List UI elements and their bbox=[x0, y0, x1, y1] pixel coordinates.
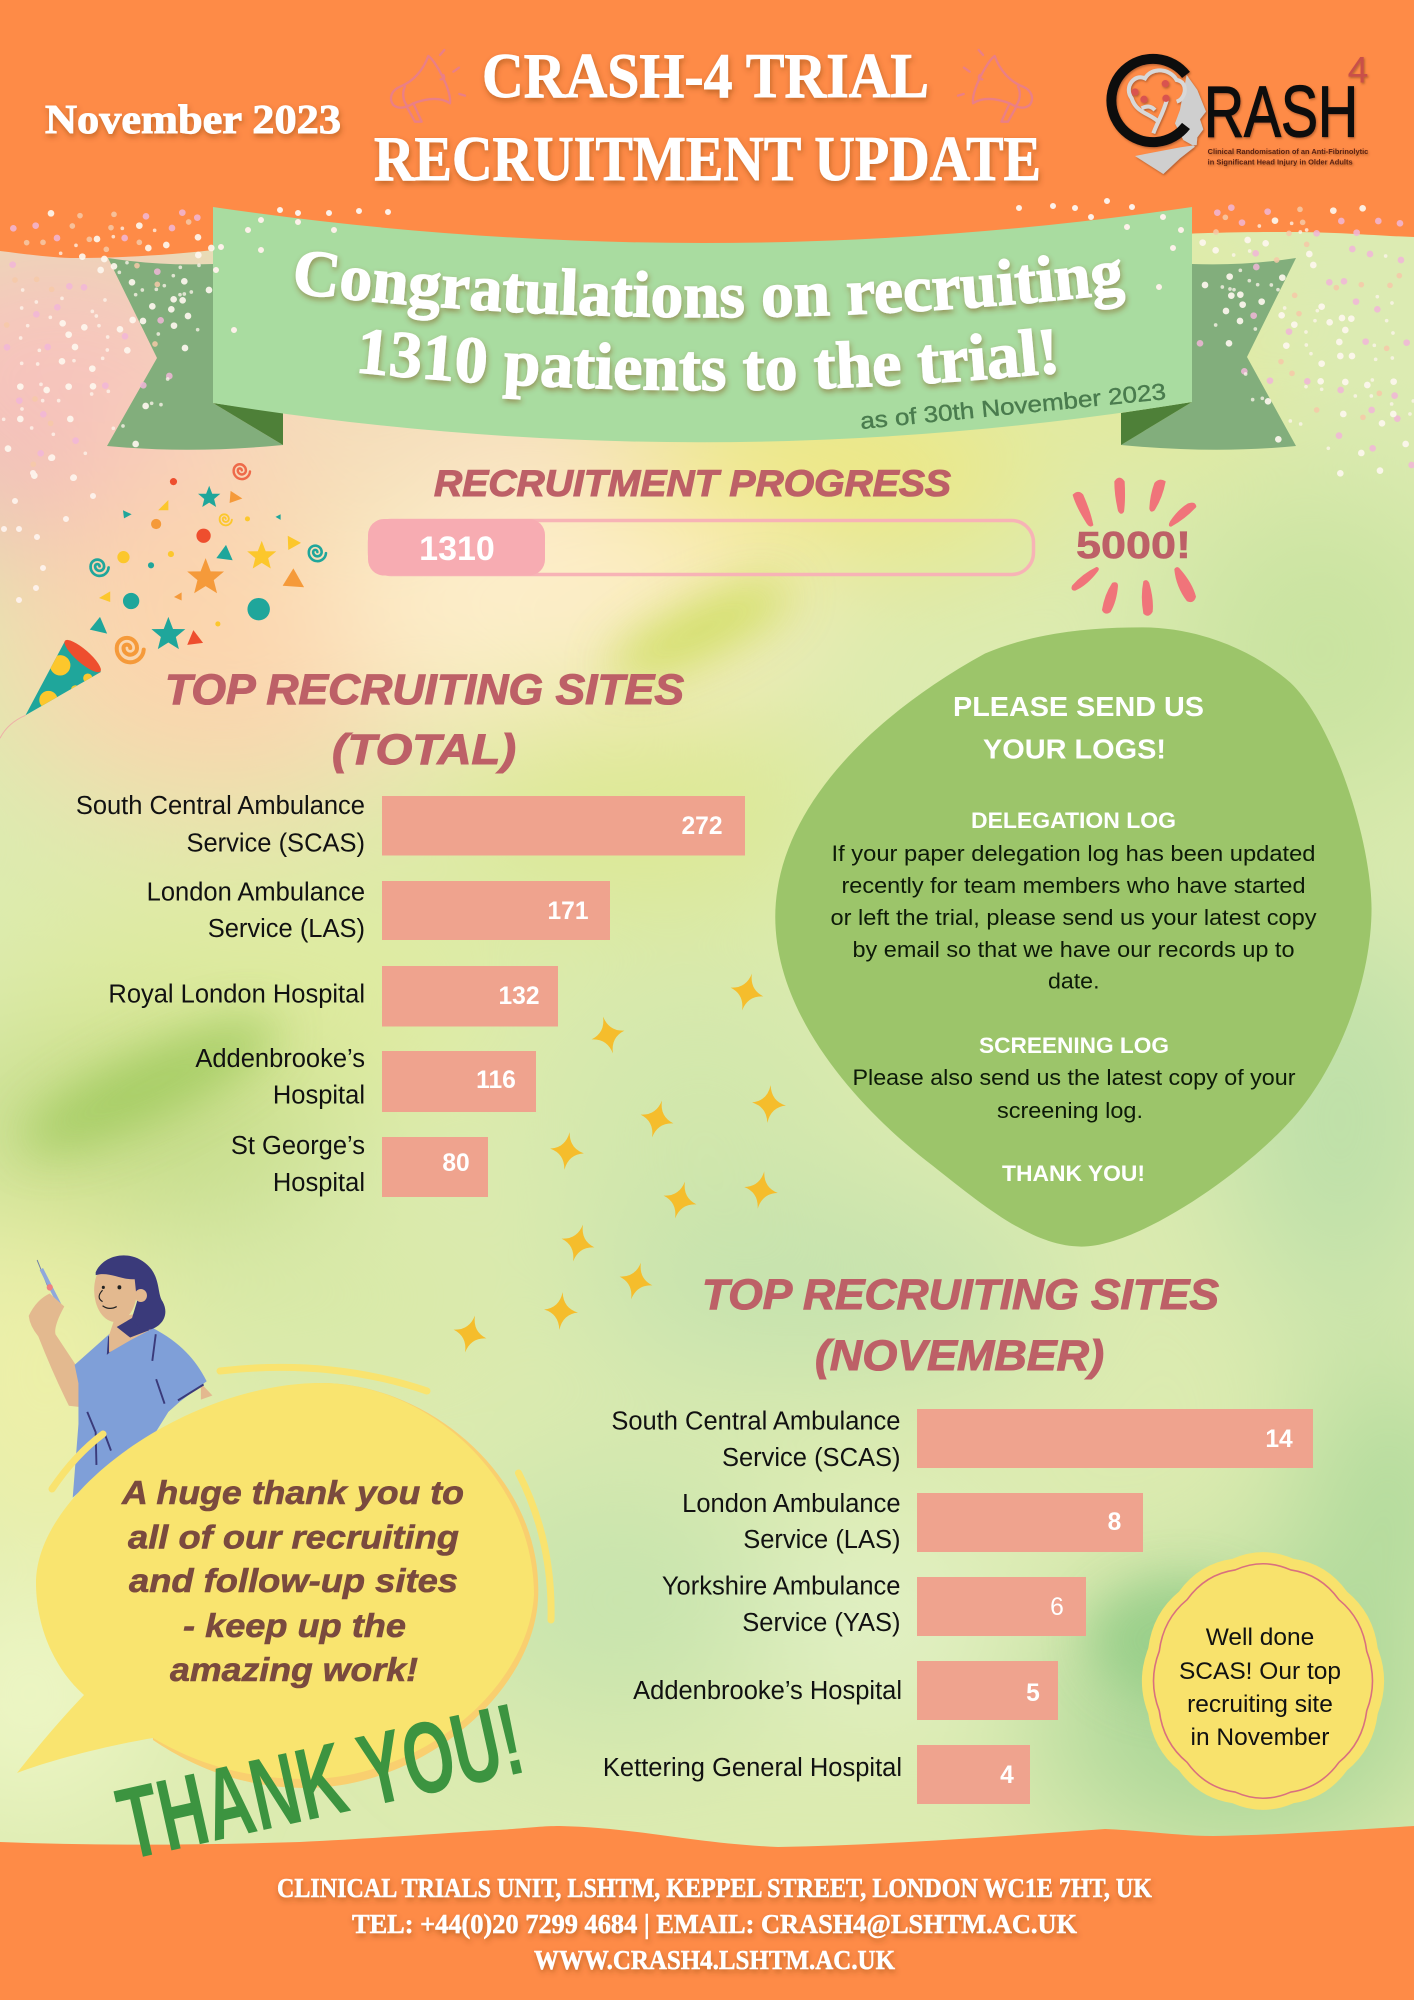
illustration: nurse with syringe bbox=[29, 1255, 212, 1498]
bubble shadow bbox=[137, 1383, 538, 1788]
bar: Addenbrooke's 116: Hospital bbox=[273, 1082, 365, 1110]
callout badge: well done SCAS: in November bbox=[1191, 1724, 1329, 1751]
bar: LAS 8 bbox=[682, 1490, 1143, 1554]
icon: megaphone left bbox=[391, 50, 465, 122]
bar: LAS 8: London Ambulance bbox=[682, 1490, 900, 1518]
bar: SCAS 14: 14 bbox=[1265, 1426, 1293, 1453]
bar: Addenbrooke's 116: 116 bbox=[476, 1067, 516, 1094]
icon: megaphone right bbox=[958, 50, 1032, 122]
icon: party popper and confetti bbox=[0, 464, 326, 738]
speech bubble bbox=[17, 1367, 551, 1788]
footer contact details: CLINICAL TRIALS UNIT, LSHTM, KEPPEL STREET, LONDON WC1E 7HT, UK bbox=[277, 1873, 1152, 1903]
panel: send us your logs: YOUR LOGS! bbox=[983, 734, 1166, 764]
banner headline: 1310 patients to the trial! bbox=[358, 328, 1060, 406]
callout badge: well done SCAS bbox=[1142, 1552, 1384, 1810]
target burst: 5000: 5000! bbox=[1076, 525, 1191, 567]
title: CRASH-4 TRIAL bbox=[482, 41, 929, 111]
panel: send us your logs bbox=[775, 627, 1372, 1247]
bar chart: November recruits bbox=[603, 1408, 1313, 1804]
callout badge: well done SCAS: SCAS! Our top bbox=[1179, 1658, 1341, 1685]
bar: St George's 80 bbox=[231, 1132, 488, 1197]
top orange band bbox=[0, 0, 1414, 258]
banner headline: Congratulations on recruiting bbox=[293, 251, 1130, 328]
logo: CRASH 4: in Significant Head Injury in Older Adults bbox=[1208, 157, 1353, 166]
bar: Kettering 4: Kettering General Hospital bbox=[603, 1754, 902, 1782]
bar: St George's 80: 80 bbox=[442, 1150, 470, 1177]
bar: Addenbrooke's 5: Addenbrooke’s Hospital bbox=[633, 1677, 902, 1705]
bar: SCAS 14: South Central Ambulance bbox=[611, 1408, 900, 1436]
panel: send us your logs: PLEASE SEND US bbox=[953, 691, 1204, 722]
panel: send us your logs: screening log. bbox=[997, 1098, 1143, 1123]
panel: send us your logs: or left the trial, please send us your latest copy bbox=[830, 905, 1317, 930]
heading: top recruiting sites total: (TOTAL) bbox=[332, 726, 516, 774]
footer contact details: WWW.CRASH4.LSHTM.AC.UK bbox=[534, 1945, 895, 1975]
bar: Kettering 4 bbox=[603, 1745, 1030, 1804]
bar: St George's 80: Hospital bbox=[273, 1169, 365, 1197]
thank you lettering: THANK YOU! bbox=[108, 1681, 533, 1881]
bar: SCAS 272: Service (SCAS) bbox=[186, 830, 365, 858]
speech bubble: - keep up the bbox=[183, 1607, 406, 1644]
bar: Kettering 4: 4 bbox=[1000, 1762, 1014, 1789]
banner headline bbox=[293, 251, 1130, 406]
bar: SCAS 272 bbox=[76, 792, 745, 858]
decorative confetti dots, right bbox=[1200, 208, 1413, 473]
bar: LAS 171 bbox=[147, 878, 610, 943]
heading: top recruiting sites total bbox=[165, 666, 684, 774]
bar: YAS 6: Service (YAS) bbox=[742, 1609, 900, 1637]
bar: LAS 8: Service (LAS) bbox=[743, 1526, 900, 1554]
title bbox=[374, 41, 1041, 194]
heading: recruitment progress: RECRUITMENT PROGRESS bbox=[434, 463, 951, 504]
ribbon banner bbox=[107, 207, 1296, 450]
logo: CRASH 4 bbox=[1111, 49, 1368, 174]
progress bar: 1310 bbox=[419, 530, 495, 568]
date label: November 2023 bbox=[45, 96, 341, 142]
speech bubble: A huge thank you to bbox=[121, 1474, 464, 1511]
bar: YAS 6: 6 bbox=[1050, 1594, 1064, 1621]
bar: Addenbrooke's 5 bbox=[633, 1661, 1058, 1720]
panel: send us your logs: by email so that we have our records up to bbox=[852, 937, 1294, 962]
decorative confetti dots, banner corners bbox=[4, 201, 1181, 600]
progress bar bbox=[368, 519, 1034, 576]
panel: send us your logs: If your paper delegation log has been updated bbox=[832, 841, 1316, 866]
logo: CRASH 4: Clinical Randomisation of an Anti-Fibrinolytic bbox=[1208, 147, 1368, 156]
title: RECRUITMENT UPDATE bbox=[374, 124, 1041, 194]
panel: send us your logs: date. bbox=[1048, 968, 1100, 994]
footer contact details: TEL: +44(0)20 7299 4684 | EMAIL: CRASH4@LSHTM.AC.UK bbox=[352, 1909, 1077, 1939]
bar: Addenbrooke's 116 bbox=[195, 1045, 536, 1112]
logo: CRASH 4: 4 bbox=[1348, 49, 1368, 91]
heading: top recruiting sites november: (NOVEMBER) bbox=[815, 1332, 1104, 1380]
heading: top recruiting sites total: TOP RECRUITING SITES bbox=[165, 666, 684, 714]
bar: Royal London 132: 132 bbox=[498, 983, 540, 1010]
bar: St George's 80: St George’s bbox=[231, 1132, 365, 1160]
speech bubble: all of our recruiting bbox=[128, 1518, 459, 1556]
bar: Royal London 132: Royal London Hospital bbox=[108, 980, 365, 1008]
bar: SCAS 14: Service (SCAS) bbox=[722, 1444, 900, 1472]
panel: send us your logs: Please also send us the latest copy of your bbox=[852, 1065, 1296, 1090]
decorative gold stars bbox=[449, 969, 788, 1357]
target burst: 5000 bbox=[1072, 478, 1196, 615]
speech bubble: and follow-up sites bbox=[129, 1562, 458, 1599]
bar: Royal London 132 bbox=[108, 966, 558, 1026]
decorative confetti dots, left bbox=[4, 213, 211, 478]
bottom orange band bbox=[0, 1826, 1414, 2000]
speech bubble: amazing work! bbox=[170, 1651, 418, 1688]
heading: top recruiting sites november: TOP RECRUITING SITES bbox=[702, 1271, 1219, 1319]
bar chart: total recruits bbox=[76, 792, 745, 1197]
panel: send us your logs: DELEGATION LOG bbox=[971, 808, 1176, 833]
bar: LAS 171: Service (LAS) bbox=[208, 915, 365, 943]
bubble body bbox=[17, 1383, 534, 1779]
callout badge: well done SCAS: Well done bbox=[1206, 1624, 1314, 1651]
bar: LAS 8: 8 bbox=[1108, 1509, 1121, 1536]
panel: send us your logs: SCREENING LOG bbox=[979, 1033, 1169, 1058]
bar: YAS 6 bbox=[662, 1572, 1086, 1637]
panel: send us your logs: recently for team members who have started bbox=[842, 873, 1306, 898]
bar: SCAS 14 bbox=[611, 1408, 1313, 1472]
bar: SCAS 272: South Central Ambulance bbox=[76, 792, 365, 820]
bar: SCAS 272: 272 bbox=[681, 813, 723, 840]
bar: YAS 6: Yorkshire Ambulance bbox=[662, 1572, 900, 1600]
logo: CRASH 4: RASH bbox=[1204, 73, 1358, 153]
bar: Addenbrooke's 116: Addenbrooke’s bbox=[195, 1045, 365, 1073]
bar: Addenbrooke's 5: 5 bbox=[1026, 1680, 1040, 1707]
callout badge: well done SCAS: recruiting site bbox=[1187, 1691, 1333, 1718]
bar: LAS 171: 171 bbox=[547, 898, 589, 925]
bar: LAS 171: London Ambulance bbox=[147, 878, 365, 906]
date note: as of 30th November 2023 bbox=[859, 378, 1167, 434]
heading: top recruiting sites november bbox=[702, 1271, 1219, 1380]
panel: send us your logs: THANK YOU! bbox=[1002, 1161, 1145, 1186]
footer contact details bbox=[277, 1873, 1152, 1975]
